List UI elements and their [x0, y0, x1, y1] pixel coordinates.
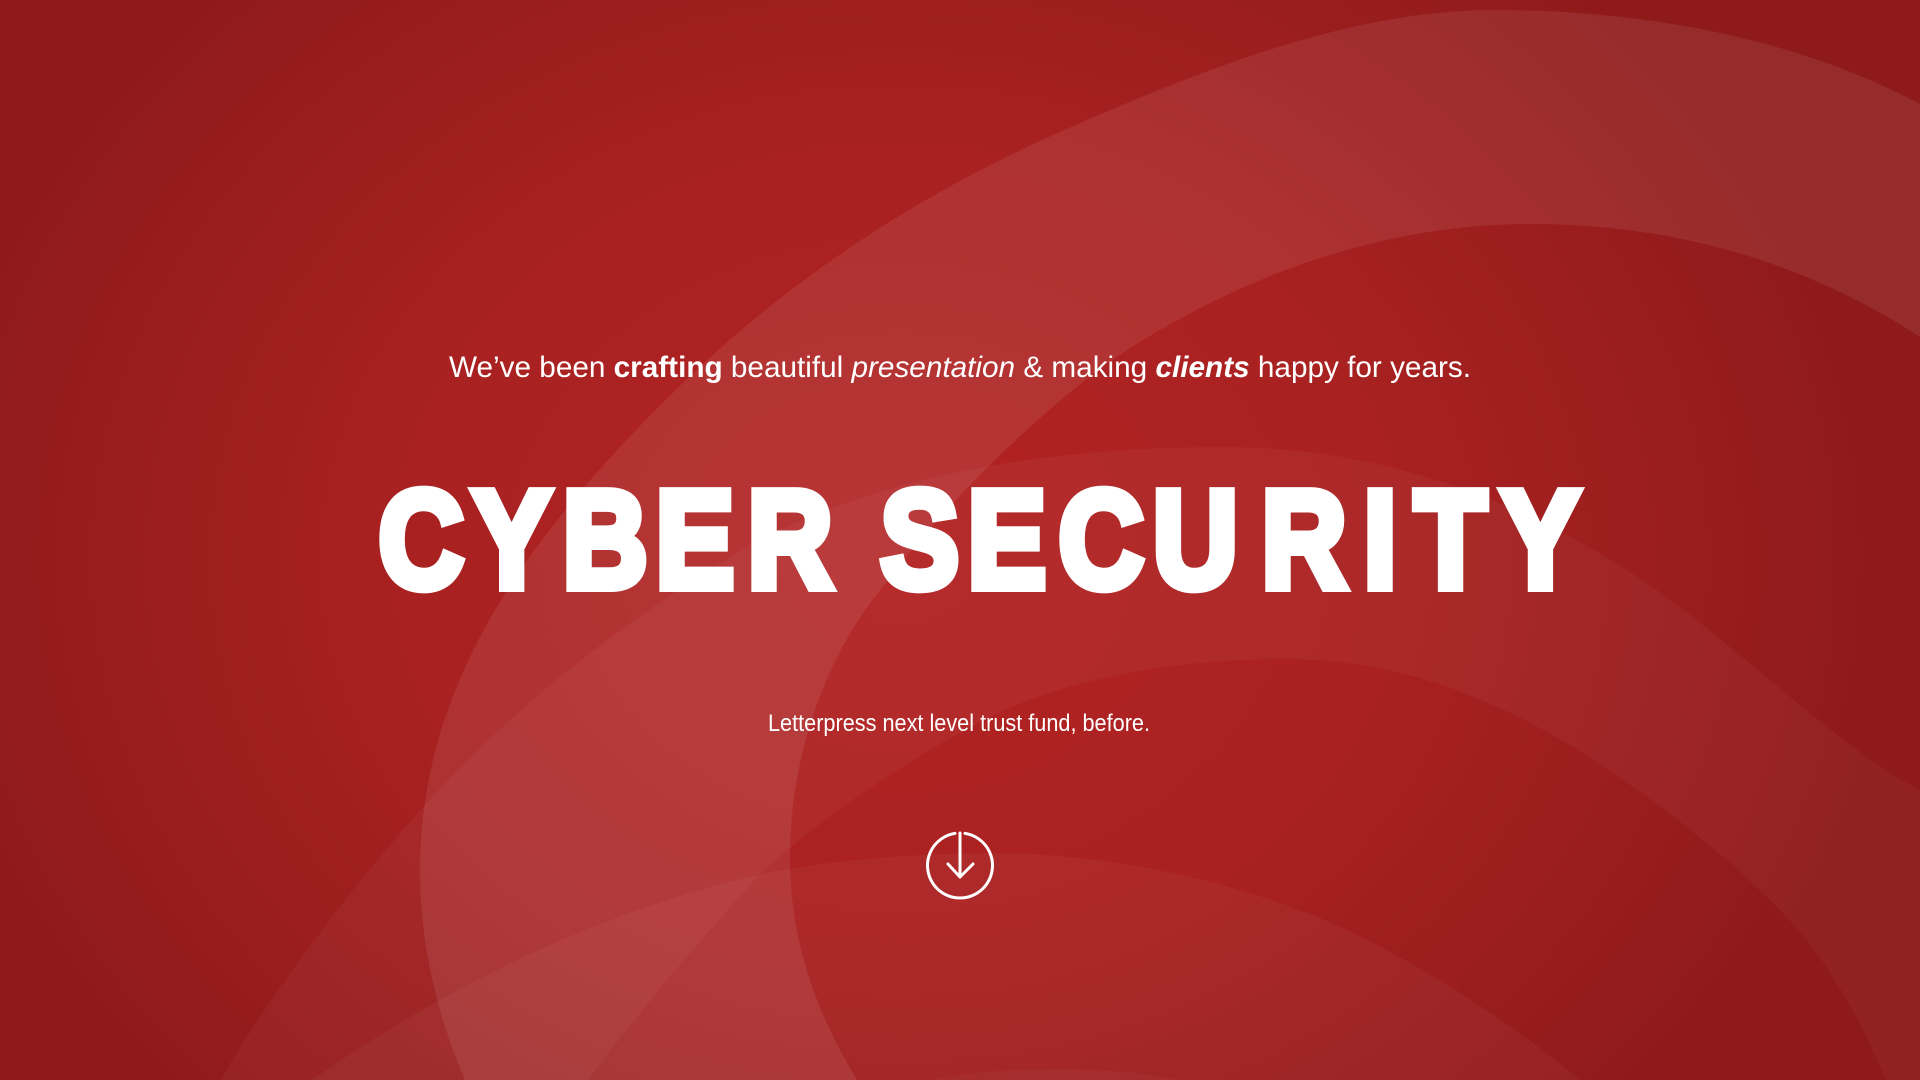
title: CYBER SECURITY [379, 463, 1580, 617]
background swoosh: lower ring [312, 853, 1580, 1080]
background swoosh: bottom sliver [930, 1069, 1180, 1080]
icon: down arrow in circle [928, 833, 992, 898]
tagline: We’ve been crafting beautiful presentation & making clients happy for years. [449, 351, 1471, 384]
background swoosh: large upper ring [420, 10, 1920, 1080]
subtitle: Letterpress next level trust fund, before. [768, 710, 1150, 737]
background swoosh: middle ring [220, 447, 1920, 1080]
